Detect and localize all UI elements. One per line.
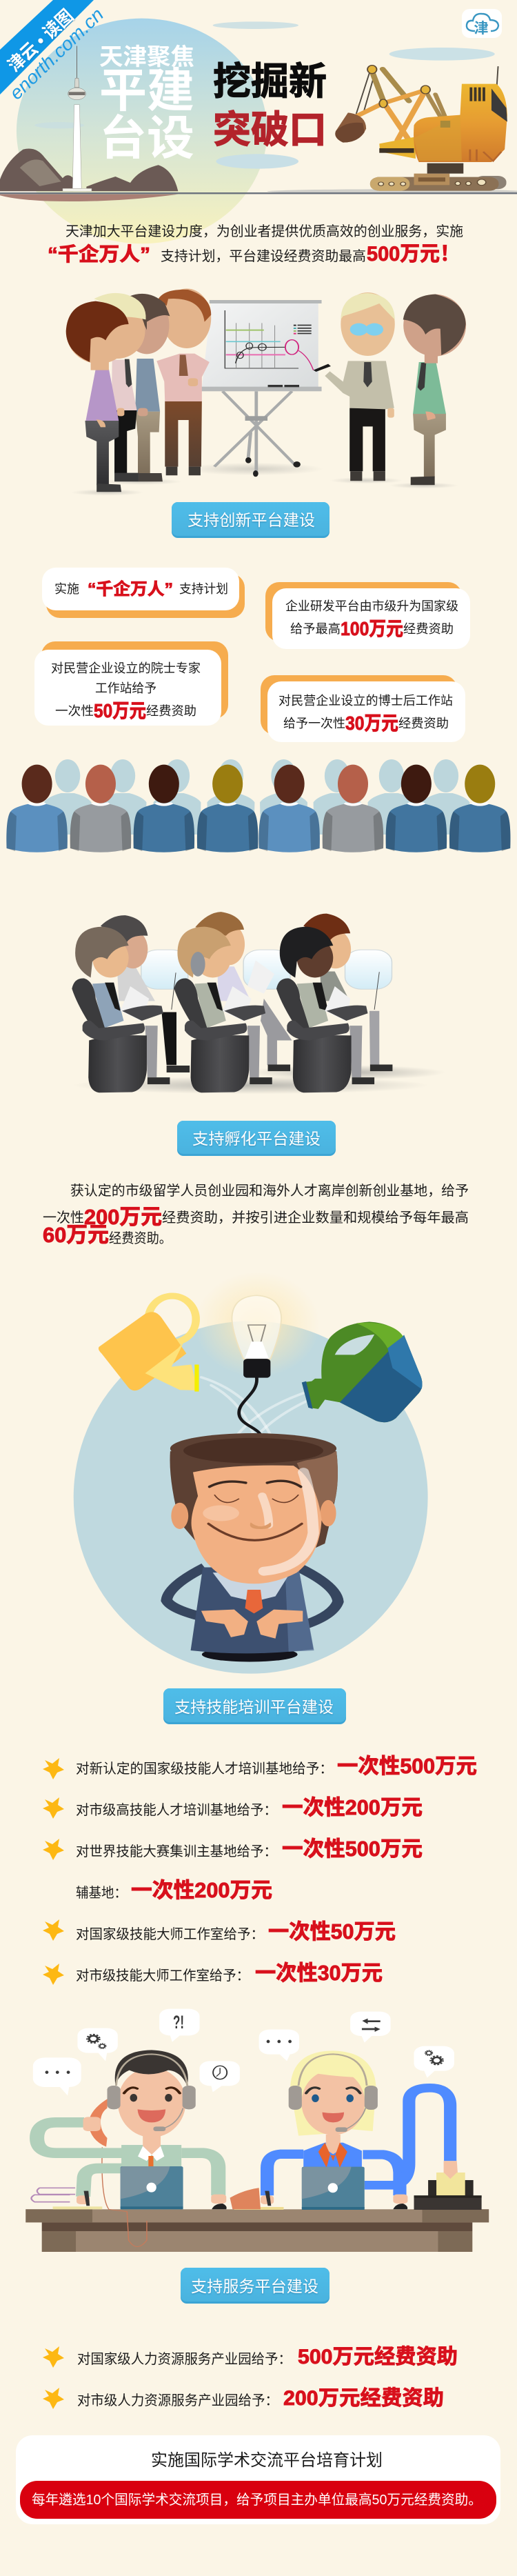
- third person: [124, 294, 170, 481]
- callout: postdoc workstation: [261, 675, 465, 742]
- item: city training base: 对市级高技能人才培训基地给予：: [76, 1802, 277, 1818]
- red strip with funding text: [20, 2481, 496, 2519]
- item: world skills auxiliary base: 一次性200万元: [131, 1879, 272, 1902]
- title: left block: 台设: [99, 112, 194, 165]
- callout: R&D platform: [265, 582, 470, 649]
- logo badge: [462, 9, 502, 38]
- item: world skills main base: 对世界技能大赛集训主基地给予：: [76, 1844, 277, 1859]
- item: city training base: [43, 1796, 423, 1819]
- mountains and tower skyline: [0, 46, 178, 201]
- section button: incubation platform: [177, 1121, 336, 1156]
- back row passengers: [101, 912, 392, 1072]
- icon: light bulb: [232, 1295, 281, 1436]
- callout: R&D platform: 给予最高: [290, 622, 341, 636]
- item: national HR park: 对国家级人力资源服务产业园给予：: [77, 2351, 292, 2367]
- callout: thousand enterprises plan: 支持计划: [179, 582, 228, 596]
- callout: R&D platform: 100万元: [341, 618, 403, 639]
- callout: postdoc workstation: 对民营企业设立的博士后工作站: [278, 694, 453, 708]
- illustration: people seated in cabin: [72, 912, 445, 1094]
- section button: service platform: [181, 2268, 330, 2304]
- flip chart: [201, 300, 322, 477]
- item: national training base: [43, 1755, 477, 1779]
- item: world skills auxiliary base: 辅基地：: [76, 1885, 127, 1901]
- figure: suit and arms: [167, 1567, 338, 1661]
- intro paragraph: 500万元！: [367, 243, 460, 266]
- presenter right: [314, 292, 395, 481]
- printer: [414, 2173, 482, 2210]
- seat and passenger: left: [72, 927, 170, 1092]
- section button: innovation platform: 支持创新平台建设: [187, 511, 315, 529]
- callout: thousand enterprises plan: [42, 568, 245, 618]
- windows: [141, 950, 392, 989]
- callout: academician workstation: [34, 641, 228, 726]
- section button: skills training platform: [163, 1688, 346, 1724]
- panel heading: 实施国际学术交流平台培育计划: [151, 2451, 383, 2470]
- title: right block: 挖掘新: [213, 60, 327, 103]
- list: skills training funding: [43, 1755, 477, 1985]
- callout: R&D platform: 经费资助: [403, 622, 454, 636]
- header banner: [0, 0, 517, 243]
- illustration: crowd of people: [6, 759, 510, 852]
- incubation paragraph: 获认定的市级留学人员创业园和海外人才离岸创新创业基地，给予: [70, 1183, 469, 1199]
- list: service platform funding: [43, 2346, 458, 2410]
- callout: thousand enterprises plan: “千企万人”: [88, 580, 173, 599]
- incubation paragraph: 60万元: [43, 1223, 109, 1247]
- figure: head and face: [170, 1433, 338, 1584]
- item: city HR park: 对市级人力资源服务产业园给予：: [77, 2393, 278, 2408]
- incubation paragraph: 经费资助，并按引进企业数量和规模给予每年最高: [162, 1210, 469, 1226]
- callout: postdoc workstation: 给予一次性: [283, 717, 345, 730]
- callout: academician workstation: 50万元: [94, 700, 146, 721]
- seat and passenger: centre: [174, 927, 272, 1092]
- speech bubbles: [33, 2009, 454, 2095]
- title: right block: [213, 60, 327, 151]
- callout: postdoc workstation: 30万元: [345, 712, 398, 734]
- item: city master studio: [43, 1961, 383, 1985]
- section button: service platform: 支持服务平台建设: [191, 2277, 318, 2295]
- intro paragraph: 天津加大平台建设力度，为创业者提供优质高效的创业服务，实施: [65, 223, 463, 239]
- section button: skills training platform: 支持技能培训平台建设: [174, 1698, 334, 1716]
- icon: green and blue watering can: [302, 1322, 423, 1422]
- item: national master studio: 对国家级技能大师工作室给予：: [76, 1926, 264, 1942]
- front row bodies: [6, 802, 510, 852]
- item: national training base: 对新认定的国家级技能人才培训基地给予：: [76, 1761, 333, 1777]
- ribbon label: 津云 • 读图: [3, 6, 77, 76]
- front row heads: [22, 765, 495, 803]
- item: city HR park: 200万元经费资助: [283, 2387, 444, 2410]
- callout: academician workstation: 经费资助: [146, 704, 196, 718]
- intro paragraph: [48, 223, 463, 266]
- incubation paragraph: [43, 1183, 469, 1247]
- floor shadows: [72, 1065, 445, 1094]
- excavator: [267, 66, 517, 194]
- item: national HR park: [43, 2346, 458, 2368]
- item: national master studio: [43, 1919, 396, 1944]
- item: national training base: 一次性500万元: [337, 1755, 477, 1778]
- floor shadows: [71, 463, 458, 496]
- intro paragraph: “千企万人”: [48, 243, 150, 265]
- backdrop ellipse and glow: [74, 1272, 428, 1674]
- item: world skills main base: 一次性500万元: [282, 1837, 423, 1861]
- title: left block: 天津聚焦: [99, 44, 194, 70]
- illustration: head with light bulb and watering cans: [74, 1272, 428, 1674]
- website label: enorth.com.cn: [6, 4, 108, 103]
- illustration: team at flip chart: [66, 288, 466, 496]
- callout: postdoc workstation: 经费资助: [398, 717, 449, 730]
- item: city HR park: [43, 2387, 444, 2410]
- man on phone: [37, 2050, 227, 2209]
- incubation paragraph: 一次性: [43, 1210, 84, 1226]
- second person: [89, 293, 148, 481]
- logo badge: 津: [474, 21, 488, 37]
- laptop lines and papers: [172, 960, 379, 1010]
- presenter group left: fourth person: [156, 288, 211, 475]
- item: national master studio: 一次性50万元: [268, 1920, 396, 1944]
- item: world skills main base: [43, 1837, 423, 1861]
- title: left block: 平建: [99, 65, 194, 117]
- icon: yellow watering can: [99, 1296, 199, 1392]
- first person: [66, 301, 131, 492]
- red strip with funding text: 每年遴选10个国际学术交流项目，给予项目主办单位最高50万元经费资助。: [32, 2492, 482, 2508]
- ground line: [0, 192, 517, 194]
- title: left block: [99, 44, 194, 165]
- bubble label: question and exclamation marks: ?!: [173, 2012, 184, 2033]
- back row: [44, 759, 469, 835]
- desk: [26, 2147, 489, 2252]
- section button: incubation platform: 支持孵化平台建设: [192, 1130, 321, 1148]
- backdrop circle and clouds: [17, 19, 495, 243]
- callout: thousand enterprises plan: 实施: [54, 582, 79, 596]
- illustration: customer service desk: [26, 2009, 489, 2252]
- item: city master studio: 对市级技能大师工作室给予：: [76, 1968, 250, 1984]
- incubation paragraph: 经费资助。: [109, 1230, 172, 1246]
- water streams: [201, 1377, 307, 1459]
- woman with long arm: [261, 2050, 458, 2209]
- right person: [403, 294, 466, 485]
- callout: R&D platform: 企业研发平台由市级升为国家级: [285, 599, 458, 613]
- books and desk items: [31, 2188, 284, 2210]
- callout: academician workstation: 一次性: [55, 704, 94, 718]
- corner ribbon: [0, 0, 94, 94]
- section button: innovation platform: [172, 502, 330, 538]
- title: right block: 突破口: [213, 108, 327, 151]
- item: city training base: 一次性200万元: [282, 1796, 423, 1819]
- seat and passenger: right: [276, 927, 374, 1092]
- intro paragraph: 支持计划，平台建设经费资助最高: [161, 248, 366, 264]
- laptops: [121, 2166, 365, 2210]
- item: city master studio: 一次性30万元: [255, 1961, 383, 1985]
- callout: academician workstation: 对民营企业设立的院士专家: [51, 661, 201, 675]
- callout: academician workstation: 工作站给予: [95, 681, 156, 695]
- panel: international academic exchange: [16, 2435, 500, 2524]
- bubble icons: [45, 2019, 443, 2079]
- item: national HR park: 500万元经费资助: [298, 2346, 458, 2368]
- incubation paragraph: 200万元: [84, 1205, 162, 1229]
